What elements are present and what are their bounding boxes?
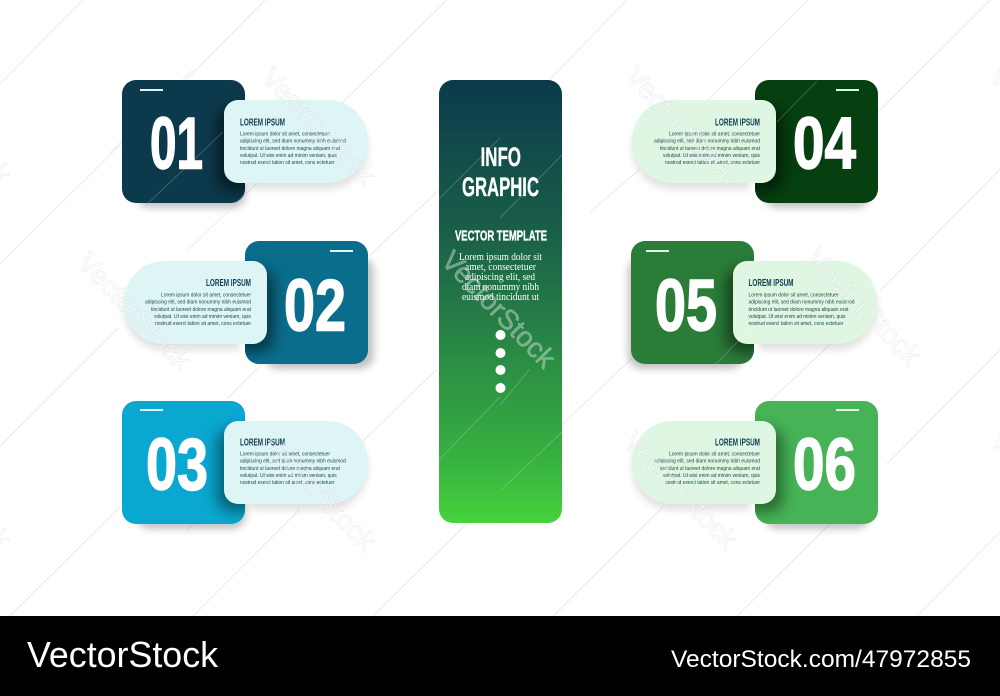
text block 01: nostrud exerci tation sit amet, cons ectetuer (240, 160, 334, 166)
card 05 (628, 241, 877, 369)
number square 06 (755, 401, 878, 524)
text block 01: LOREM IPSUM (240, 118, 285, 128)
number square 04 (755, 80, 878, 203)
text block 01: volutpat. Ut wisi enim ad minim veniam, quis (240, 153, 337, 159)
title: GRAPHIC (462, 172, 539, 202)
accent bar 02 (330, 250, 353, 252)
number square 02 (245, 241, 368, 364)
footer logo text: VectorStock (27, 634, 219, 675)
description text (459, 252, 542, 303)
description text: diam nonummy nibh (462, 282, 539, 293)
number square 03 (122, 401, 245, 524)
text block 02: nostrud exerci tation sit amet, cons ectetuer (155, 321, 251, 327)
footer image id: VectorStock.com/47972855 (671, 646, 971, 673)
text block 05: volutpat. Ut wisi enim ad minim veniam, quis (748, 314, 846, 320)
text block 05: Lorem ipsum dolor sit amet, consectetuer (748, 292, 839, 298)
number 01: 01 (150, 104, 203, 184)
text block 02: LOREM IPSUM (206, 278, 251, 289)
number 05: 05 (655, 266, 717, 346)
card 01 (122, 80, 368, 208)
watermark text: VectorStock (255, 62, 383, 192)
description text: Lorem ipsum dolor sit (459, 252, 542, 263)
number 04: 04 (793, 104, 856, 184)
card 06 (632, 401, 878, 529)
accent bar 05 (646, 250, 669, 252)
text block 03: adipiscing elit, sed diam nonummy nibh euismod (240, 459, 346, 465)
watermark text: VectorStock (800, 242, 928, 372)
card 03 (122, 401, 368, 529)
description text: euismod tincidunt ut (462, 292, 539, 303)
watermark text: VectorStock (71, 247, 199, 377)
accent bar 01 (140, 89, 163, 91)
text block 02 (145, 278, 251, 327)
text block 03: LOREM IPSUM (240, 438, 285, 449)
text block 04: nostrud exerci tation sit amet, cons ectetuer (665, 160, 760, 166)
text block 05 (748, 278, 854, 327)
number square 01 (122, 80, 245, 203)
text block 05: nostrud exerci tation sit amet, cons ectetuer (748, 321, 844, 327)
text block 02: volutpat. Ut wisi enim ad minim veniam, quis (154, 314, 251, 320)
title (462, 142, 539, 202)
text block 03: volutpat. Ut wisi enim ad minim veniam, quis (240, 473, 337, 479)
accent bar 04 (836, 89, 859, 91)
number 02: 02 (284, 266, 346, 346)
card 04 (632, 80, 878, 208)
text block 06 (654, 438, 760, 486)
text pill 03 (224, 421, 368, 504)
text block 01: adipiscing elit, sed diam nonummy nibh euismod (240, 138, 346, 144)
text block 04: volutpat. Ut wisi enim ad minim veniam, quis (663, 153, 760, 159)
card 02 (124, 241, 374, 369)
dots (496, 330, 506, 393)
text block 03 (240, 438, 346, 486)
text block 06: nostrud exerci tation sit amet, cons ectetuer (665, 480, 760, 486)
text block 02: Lorem ipsum dolor sit amet, consectetuer (161, 292, 251, 298)
text block 06: volutpat. Ut wisi enim ad minim veniam, quis (663, 473, 760, 479)
description text: amet, consectetuer (465, 262, 537, 273)
text block 01: tincidunt ut laoreet dolore magna aliquam erat (240, 146, 340, 152)
watermark text: VectorStock (617, 426, 745, 556)
text block 05: tincidunt ut laoreet dolore magna aliquam erat (748, 307, 849, 313)
watermark text: VectorStock (255, 428, 383, 558)
text block 06: Lorem ipsum dolor sit amet, consectetuer (669, 452, 760, 458)
text block 05: LOREM IPSUM (748, 278, 794, 289)
text pill 01 (224, 100, 368, 183)
number square 05 (631, 241, 754, 364)
panel: centre title column (439, 80, 562, 523)
watermark text: VectorStock (435, 245, 563, 375)
subtitle: VECTOR TEMPLATE (455, 228, 547, 244)
text pill 02 (124, 261, 267, 344)
description text: adipiscing elit, sed (465, 272, 535, 283)
text block 06: tincidunt ut laoreet dolore magna aliquam erat (660, 466, 760, 472)
text block 03: nostrud exerci tation sit amet, cons ectetuer (240, 480, 334, 486)
text block 06: adipiscing elit, sed diam nonummy nibh euismod (654, 459, 760, 465)
text block 06: LOREM IPSUM (715, 438, 760, 449)
text block 01 (240, 118, 346, 166)
text block 04: LOREM IPSUM (715, 118, 760, 128)
title: INFO (480, 142, 521, 172)
text block 04: adipiscing elit, sed diam nonummy nibh euismod (654, 138, 760, 144)
watermark text (0, 61, 1000, 558)
text block 04 (654, 118, 760, 166)
watermark text: VectorStock (619, 61, 747, 191)
footer bar (0, 616, 1000, 696)
accent bar 06 (836, 409, 859, 411)
text block 02: adipiscing elit, sed diam nonummy nibh euismod (145, 300, 251, 306)
text block 04: tincidunt ut laoreet dolore magna aliquam erat (660, 146, 760, 152)
number 03: 03 (146, 424, 208, 506)
text pill 04 (632, 100, 776, 183)
text block 01: Lorem ipsum dolor sit amet, consectetuer (240, 131, 330, 137)
text block 04: Lorem ipsum dolor sit amet, consectetuer (669, 131, 760, 137)
text block 03: Lorem ipsum dolor sit amet, consectetuer (240, 452, 330, 458)
text pill 05 (733, 261, 877, 344)
text block 03: tincidunt ut laoreet dolore magna aliquam erat (240, 466, 340, 472)
text pill 06 (632, 421, 776, 504)
accent bar 03 (140, 409, 163, 411)
number 06: 06 (793, 424, 856, 506)
text block 05: adipiscing elit, sed diam nonummy nibh euismod (748, 300, 854, 306)
text block 02: tincidunt ut laoreet dolore magna aliquam erat (151, 307, 251, 313)
